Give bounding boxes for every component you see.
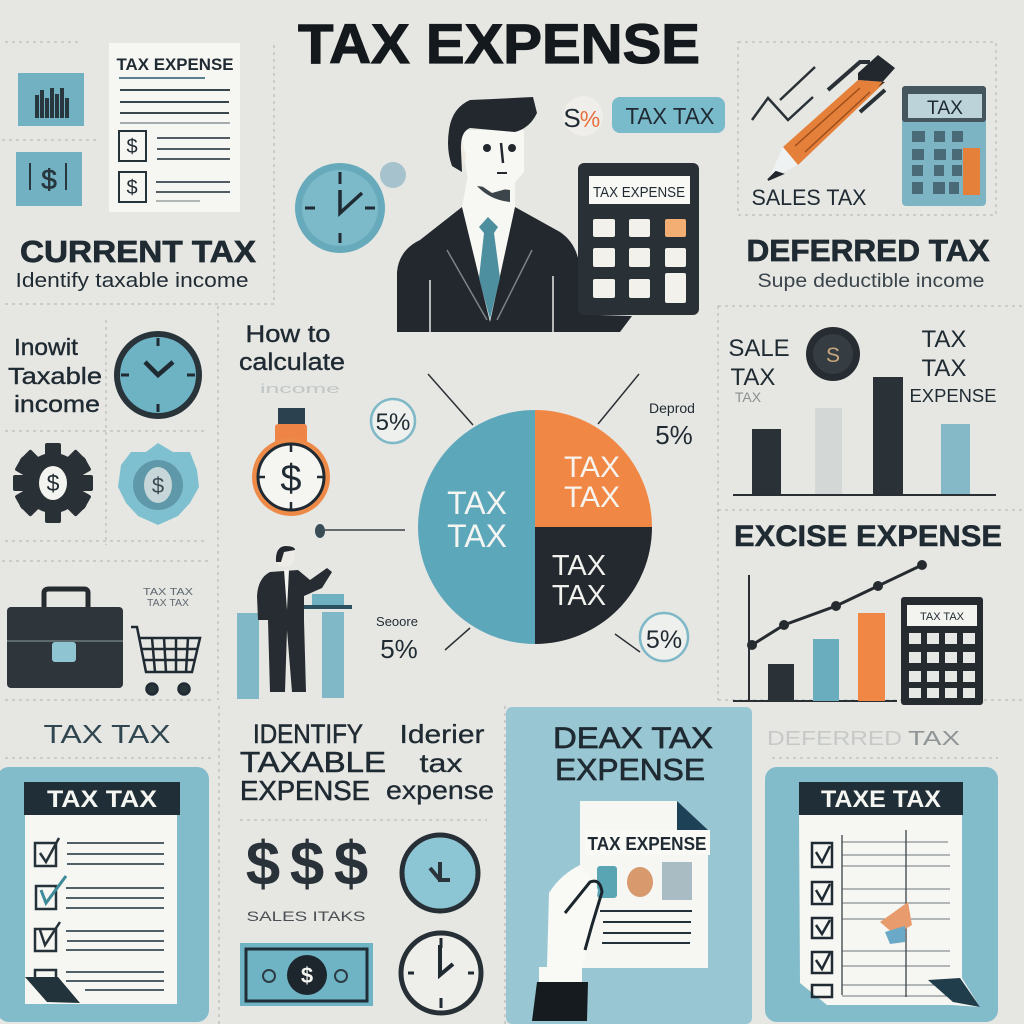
label: deprod 5% — [649, 400, 695, 450]
icon: faded pill — [380, 162, 406, 188]
illustration: hand and cuff — [532, 865, 602, 1021]
icon: teal gear with dollar — [118, 443, 199, 525]
panel: trend chart and calculator — [733, 560, 983, 705]
badge: 5% upper left — [371, 399, 415, 443]
heading: tax expense: EXPENSE — [555, 752, 705, 787]
icons: dollar signs: $ — [246, 830, 280, 899]
label: seoore 5% — [376, 614, 418, 664]
icon: teal chart tile — [18, 73, 84, 126]
text: deferred tax expense: expense — [386, 775, 494, 805]
calculator: tax: TAX — [927, 98, 963, 119]
label: faded deferred tax: DEFERRED — [767, 728, 902, 750]
label: tax tax expense: TAX — [922, 326, 966, 353]
panel: deduct tax expense — [506, 707, 752, 1024]
label: tax tax expense: EXPENSE — [910, 386, 996, 406]
bar chart — [733, 377, 996, 495]
label: tax tax teal: TAX — [447, 485, 507, 521]
illustration: businessman with calculator — [397, 97, 632, 332]
icon: dark clock: S — [826, 344, 840, 367]
icon: wall clock — [295, 163, 385, 253]
icon: clock light — [401, 933, 481, 1013]
label: sale tax: TAX — [731, 364, 775, 391]
icon: teal gear with dollar: $ — [152, 473, 164, 498]
icon: shopping cart — [131, 627, 200, 694]
label: tax tax teal: TAX — [447, 518, 507, 554]
heading: identify taxable expense: EXPENSE — [240, 775, 370, 806]
label: faded deferred tax — [767, 728, 960, 750]
small caption — [143, 587, 193, 609]
heading tag: taxe tax — [799, 782, 963, 815]
badge: 5% lower right — [640, 613, 688, 661]
title: TAX EXPENSE — [298, 12, 700, 75]
icon: orange pen — [768, 55, 895, 180]
chart: pie tax breakdown — [418, 374, 652, 652]
icon: banknote — [240, 943, 373, 1006]
panel: deferred tax — [746, 55, 990, 292]
document: held tax expense: TAX EXPENSE — [588, 834, 706, 854]
heading: identify taxable expense: IDENTIFY — [253, 719, 363, 749]
calculator: tax — [902, 86, 986, 206]
illustration: standing person — [237, 545, 352, 699]
badge: percent — [563, 96, 603, 136]
icon: dollar tile: $ — [41, 164, 57, 195]
panel: taxable income — [8, 334, 199, 525]
icon: dollar tile — [16, 152, 82, 206]
heading: tax expense: DEAX TAX — [553, 722, 713, 755]
label: tax tax strip: TAX TAX — [44, 719, 170, 749]
badge: 5% upper left: 5% — [376, 409, 410, 436]
icon: dark gear with dollar — [13, 443, 93, 523]
pie slice: teal — [418, 410, 535, 644]
heading: identify taxable expense: TAXABLE — [240, 747, 386, 779]
subheading: deductible income: Supe deductible income — [758, 271, 984, 292]
label: faded deferred tax: TAX — [908, 728, 960, 750]
faded caption: income — [260, 381, 340, 396]
badge: tax tax — [612, 97, 725, 133]
line and bar chart — [733, 560, 927, 701]
badge: tax tax: TAX TAX — [626, 103, 714, 129]
panel: identify taxable expense — [240, 719, 494, 1013]
text: deferred tax expense: tax — [420, 748, 462, 778]
icon: dark clock — [806, 327, 860, 381]
label: sale tax — [728, 335, 790, 405]
label: tax tax expense — [910, 326, 996, 406]
calculator: tax expense: TAX EXPENSE — [593, 184, 685, 201]
icon: banknote: $ — [301, 963, 313, 988]
label: tax tax orange: TAX — [564, 481, 620, 514]
heading: deferred tax: DEFERRED TAX — [746, 233, 990, 268]
heading tag: tax tax: TAX TAX — [47, 786, 157, 813]
icons: dollar signs: $ — [334, 830, 368, 899]
label: tax tax dark: TAX — [552, 550, 606, 582]
document: tax expense sheet: $ — [126, 136, 138, 158]
small caption: TAX TAX — [143, 587, 193, 598]
icon: dark gear with dollar: $ — [47, 470, 60, 496]
heading: identify taxable expense — [240, 719, 386, 806]
label: tax tax dark — [552, 550, 606, 612]
label: tax tax orange: TAX — [564, 451, 620, 484]
small caption: TAX TAX — [147, 598, 189, 609]
pie slice: orange — [535, 410, 652, 527]
label: sale tax: SALE — [728, 335, 790, 362]
document: held tax expense — [580, 801, 710, 968]
pie slice: dark — [535, 527, 652, 644]
heading: excise expense: EXCISE EXPENSE — [734, 520, 1002, 553]
icon: stopwatch with dollar: $ — [280, 458, 302, 500]
badge: percent: S — [563, 103, 581, 133]
subheading: identify taxable income: Identify taxable income — [16, 270, 248, 292]
connector: leader with dot — [315, 524, 405, 538]
icons: dollar signs: $ — [290, 830, 324, 899]
text: taxable income: Inowit — [14, 334, 79, 360]
text: taxable income — [8, 334, 102, 417]
label: sales tax: SALES ITAKS — [246, 908, 366, 924]
calculator: dark — [901, 597, 983, 705]
badge: percent: % — [580, 106, 600, 132]
document: tax expense sheet: TAX EXPENSE — [116, 55, 234, 74]
document: checklist — [25, 812, 177, 1004]
label: tax tax expense: TAX — [922, 355, 966, 382]
heading tag: tax tax — [24, 782, 180, 815]
icon: stopwatch with dollar — [252, 408, 330, 516]
label: sales tax: SALES TAX — [752, 185, 867, 210]
document: tax expense sheet — [109, 43, 240, 212]
panel: sale tax bars — [728, 326, 1002, 553]
label: tax tax orange — [564, 451, 620, 514]
label: deprod 5%: Deprod — [649, 400, 695, 416]
calculator: dark: TAX TAX — [920, 611, 965, 623]
text: taxable income: Taxable — [8, 363, 102, 389]
panel: briefcase and cart — [7, 587, 200, 694]
panel: current tax — [16, 43, 256, 292]
panel: tax checklist — [0, 767, 209, 1022]
label: seoore 5%: Seoore — [376, 614, 418, 629]
panel: taxe tax checklist — [765, 728, 998, 1022]
label: seoore 5%: 5% — [380, 634, 418, 664]
chart: small line — [752, 67, 815, 120]
icons: dollar signs — [246, 830, 368, 899]
text: deferred tax expense — [386, 719, 494, 805]
panel: how to calculate — [237, 321, 405, 699]
heading: current tax: CURRENT TAX — [20, 234, 256, 269]
document: table checklist — [799, 812, 980, 1007]
heading: tax expense — [553, 722, 713, 787]
label: deprod 5%: 5% — [655, 420, 693, 450]
calculator: tax expense — [578, 163, 699, 315]
heading tag: taxe tax: TAXE TAX — [821, 786, 941, 813]
badge: 5% lower right: 5% — [646, 626, 682, 654]
text: taxable income: income — [14, 391, 100, 417]
label: tax tax teal — [447, 485, 507, 554]
text: deferred tax expense: Iderier — [400, 719, 485, 749]
icon: clock teal — [402, 835, 478, 911]
heading: how to calculate: How to — [246, 321, 330, 348]
icon: clock — [117, 334, 199, 416]
label: sale tax: TAX — [735, 389, 762, 405]
label: tax tax dark: TAX — [552, 580, 606, 612]
heading: how to calculate — [239, 321, 345, 376]
heading: how to calculate: calculate — [239, 349, 345, 376]
icon: briefcase — [7, 589, 123, 688]
document: tax expense sheet: $ — [126, 177, 138, 199]
